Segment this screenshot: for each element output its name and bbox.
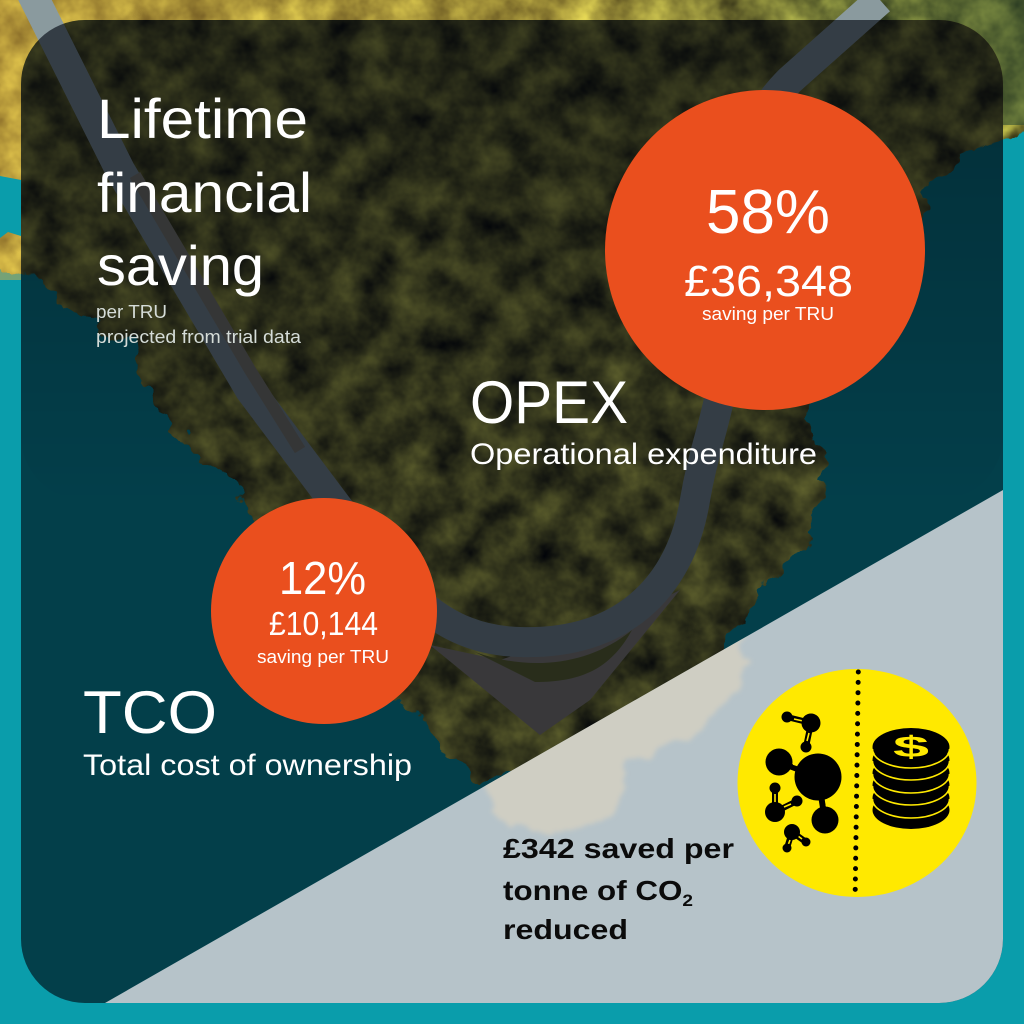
OPEX label xyxy=(470,369,817,471)
CO2 saving text: £342 saved per xyxy=(503,833,734,864)
ghosted trees in light panel xyxy=(470,620,745,835)
heading: lifetime financial saving: Lifetime xyxy=(97,87,308,150)
light diagonal panel xyxy=(105,490,1003,1003)
TCO saving circle: saving per TRU xyxy=(257,647,389,667)
CO2 saving text: 2 xyxy=(682,891,693,910)
OPEX saving circle: 58% xyxy=(706,178,830,247)
TCO saving circle: 12% xyxy=(279,552,366,604)
CO2 saving text: reduced xyxy=(503,914,628,945)
OPEX label: OPEX xyxy=(470,369,628,436)
OPEX saving circle xyxy=(605,90,925,410)
dotted divider xyxy=(855,672,858,891)
yellow icon circle xyxy=(738,669,976,897)
TCO saving circle xyxy=(211,498,437,724)
CO2 saving text xyxy=(503,833,734,945)
heading sub-text: per TRU xyxy=(96,302,167,322)
icon: coin stack xyxy=(872,728,950,829)
heading: lifetime financial saving xyxy=(97,87,312,297)
heading sub-text: projected from trial data xyxy=(96,327,302,347)
heading: lifetime financial saving: financial xyxy=(97,161,312,224)
TCO label: Total cost of ownership xyxy=(83,749,412,782)
icon: molecules xyxy=(765,712,842,852)
heading: lifetime financial saving: saving xyxy=(97,234,264,297)
background photo: lake and forest with road xyxy=(0,0,1024,785)
TCO label xyxy=(83,679,412,782)
heading sub-text xyxy=(96,302,302,347)
icon: coin stack: $ xyxy=(893,731,930,764)
OPEX saving circle: £36,348 xyxy=(684,257,853,306)
OPEX saving circle: saving per TRU xyxy=(702,304,834,324)
OPEX label: Operational expenditure xyxy=(470,438,817,471)
CO2 saving text: tonne of CO xyxy=(503,875,663,906)
TCO saving circle: £10,144 xyxy=(269,605,378,642)
TCO label: TCO xyxy=(83,679,217,746)
